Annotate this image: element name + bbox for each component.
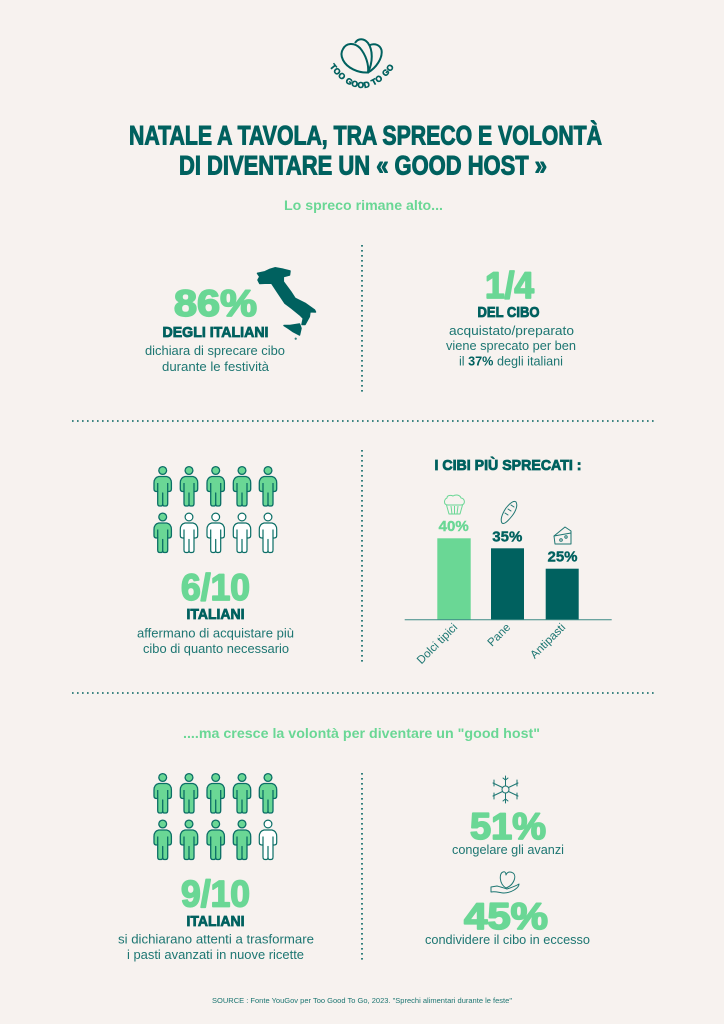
stat: 86%: 86%: [174, 283, 257, 324]
description: [118, 932, 314, 962]
label: italiani: ITALIANI: [186, 606, 244, 623]
pictogram: 9 of 10 people: [154, 774, 277, 860]
label: italiani: ITALIANI: [186, 913, 244, 930]
category labels: Dolci tipici: [415, 622, 460, 667]
description: dichiara di sprecare cibo: [145, 344, 285, 358]
label: degli italiani: DEGLI ITALIANI: [162, 324, 268, 341]
category labels: [415, 622, 568, 667]
stat: 51%: 51%: [470, 806, 546, 847]
description: [446, 324, 576, 368]
category labels: Pane: [486, 622, 513, 649]
stat: 1/4: 1/4: [485, 265, 534, 306]
description: acquistato/preparato: [449, 324, 574, 338]
value labels: [439, 518, 578, 566]
icon: cheese: [554, 527, 571, 544]
bar chart: [405, 518, 612, 667]
value labels: 35%: [492, 528, 522, 546]
icon: muffin: [444, 495, 464, 514]
logo: Too Good To Go: TOO GOOD TO GO: [330, 62, 394, 88]
stat: 9/10: 9/10: [181, 874, 250, 914]
pictogram: 6 of 10 people: [154, 467, 277, 552]
title: NATALE A TAVOLA, TRA SPRECO E VOLONTÀ: [129, 120, 602, 150]
icon: hand with heart: [491, 872, 519, 893]
dotted dividers: [72, 245, 654, 963]
section heading: spreco: Lo spreco rimane alto...: [284, 198, 443, 213]
description: [137, 626, 294, 656]
icon: map of Italy: [258, 268, 316, 339]
panel: 6/10 italiani: [137, 467, 294, 656]
section heading: good host: ....ma cresce la volontà per diventare un "good host": [183, 726, 540, 741]
panel: 86% degli italiani: [145, 268, 316, 374]
description: cibo di quanto necessario: [143, 642, 289, 656]
bar: pane 35%: [491, 548, 524, 620]
value labels: 40%: [439, 518, 469, 535]
panel: 9/10 italiani: [118, 774, 314, 962]
category labels: Antipasti: [528, 622, 568, 661]
panel: good host actions: [425, 776, 590, 947]
description: congelare gli avanzi: [452, 843, 564, 857]
description: si dichiarano attenti a trasformare: [118, 932, 314, 946]
chart title: I CIBI PIÙ SPRECATI :: [434, 456, 582, 474]
title: [129, 120, 602, 180]
panel: 1/4 del cibo: [446, 265, 576, 368]
description: il 37% degli italiani: [459, 354, 563, 368]
axis: [405, 619, 612, 621]
description: [145, 344, 285, 374]
bar: antipasti 25%: [546, 569, 579, 620]
value labels: 25%: [547, 548, 578, 566]
description: durante le festività: [162, 360, 269, 374]
stat: 6/10: 6/10: [181, 567, 250, 608]
logo: Too Good To Go: [330, 38, 394, 88]
bar: dolci tipici 40%: [437, 538, 471, 620]
icon: snowflake: [493, 776, 518, 803]
description: viene sprecato per ben: [446, 339, 576, 353]
stat: 45%: 45%: [464, 896, 548, 937]
label: del cibo: DEL CIBO: [478, 305, 540, 321]
description: condividere il cibo in eccesso: [425, 933, 590, 947]
description: i pasti avanzati in nuove ricette: [127, 948, 304, 962]
source note: SOURCE : Fonte YouGov per Too Good To Go, 2023. "Sprechi alimentari durante le feste": [212, 996, 512, 1005]
description: affermano di acquistare più: [137, 626, 294, 640]
icon: baguette: [501, 501, 517, 524]
panel: i cibi più sprecati: [405, 456, 612, 667]
title: DI DIVENTARE UN « GOOD HOST »: [179, 150, 547, 180]
